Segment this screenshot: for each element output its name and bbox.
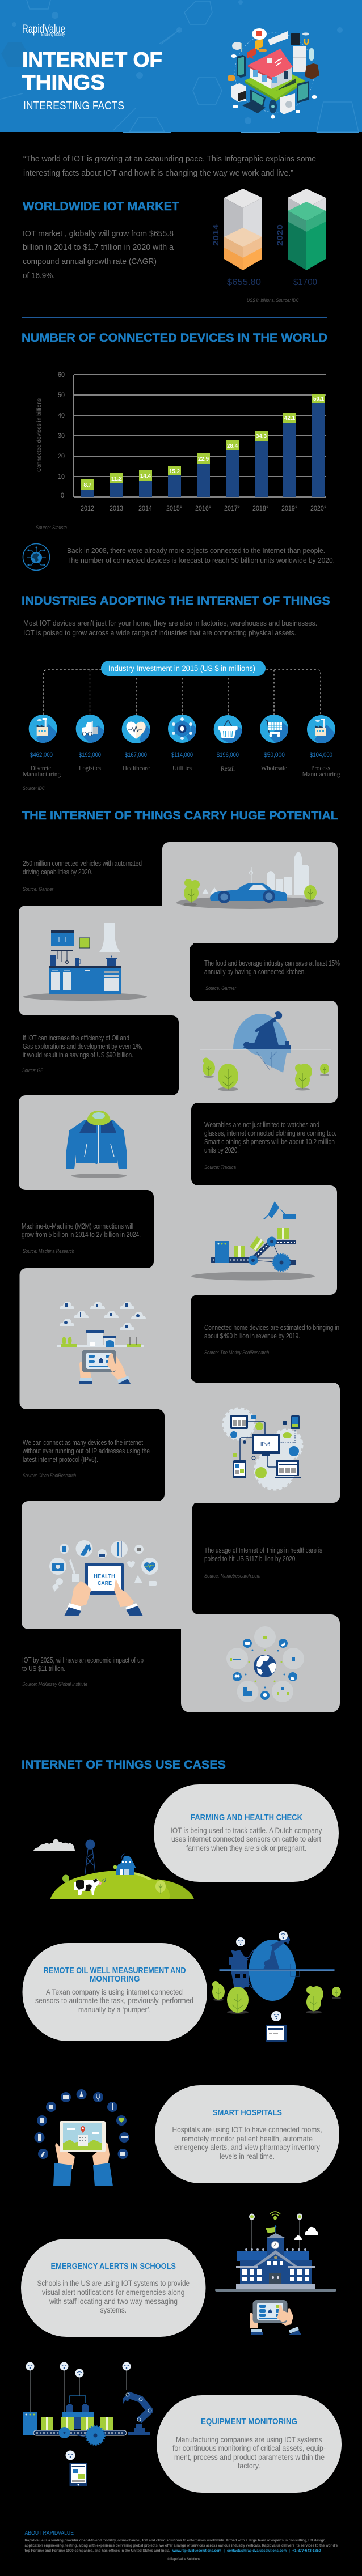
- cow: [74, 1878, 106, 1895]
- about section: [25, 2530, 338, 2561]
- fact: M2M: Machine-to-Machine (M2M) connections will: [22, 1222, 133, 1230]
- illustration: equipment monitoring: [23, 2362, 151, 2486]
- fact: food and beverage: annually by having a connected kitchen.: [204, 968, 306, 976]
- about section: ABOUT RAPIDVALUE: [25, 2530, 74, 2536]
- year labels: 2014: [211, 224, 220, 246]
- illustration: IPv6 network: [224, 1409, 302, 1489]
- panel: serpentine grey background: [0, 827, 362, 1725]
- panel: equipment monitoring: factory.: [238, 2461, 260, 2470]
- fact: healthcare: [204, 1546, 322, 1579]
- illustration: farm and cow: [33, 1839, 194, 1899]
- industry names: Manufacturing: [302, 770, 340, 778]
- industry investment values: $167,000: [125, 751, 147, 759]
- bars: 8.7: [84, 482, 92, 488]
- column 2020: [288, 189, 326, 270]
- chart: market hexagon columns: 2020: [275, 224, 284, 246]
- subtitle: INTERESTING FACTS: [23, 100, 124, 112]
- panel: smart hospitals: emergency alerts, and view pharmacy inventory: [174, 2143, 320, 2152]
- bars: 28.4: [227, 443, 238, 449]
- panel: emergency alerts in schools: systems.: [100, 2305, 127, 2314]
- medical icon ring: [34, 2089, 129, 2159]
- about section: © RapidValue Solutions: [167, 2557, 200, 2561]
- fact: connected vehicles: 250 million connected vehicles with automated: [23, 860, 142, 868]
- industry icon: utilities: [168, 715, 196, 743]
- market text: IOT market , globally will grow from $655.8: [23, 229, 174, 239]
- industry icon: wholesale: [260, 715, 288, 743]
- panel: emergency alerts in schools: EMERGENCY ALERTS IN SCHOOLS: [51, 2262, 176, 2271]
- logo: Enabling Mobility: [41, 33, 65, 37]
- tablet and hands: [79, 1350, 131, 1384]
- tablet: [266, 2025, 287, 2042]
- axis labels: 2012: [81, 505, 94, 512]
- tablet label: HEALTH: [94, 1573, 115, 1580]
- axis labels: 2019*: [281, 505, 297, 512]
- industries text: IOT is poised to grow across a wide range of industries that are connecting physical assets.: [23, 629, 296, 637]
- industry icon: logistics: [76, 715, 104, 743]
- intro quote: interesting facts about IOT and how it is changing the way we work and live.”: [23, 169, 293, 178]
- market text: of 16.9%.: [23, 271, 55, 280]
- panel: farming and health check: [154, 1784, 339, 1882]
- 2008 fact text: [67, 547, 335, 564]
- panel: farming and health check: uses internet connected sensors on cattle to alert: [171, 1834, 321, 1843]
- axis labels: Connected devices in billions: [36, 398, 43, 472]
- wifi bubbles: [26, 2362, 131, 2460]
- title: [22, 48, 162, 94]
- about section: application engineering, testing, along with experience delivering global projects, we offer a range of services across various industry verticals. RapidValue delivers its services to the world's: [25, 2544, 338, 2548]
- header banner: [0, 0, 362, 133]
- illustration: IPv6 network: IPv6: [260, 1441, 270, 1448]
- industry icon: process manufacturing: [307, 715, 335, 743]
- bars: 11.2: [111, 475, 122, 482]
- panel: equipment monitoring: for continuous monitoring of critical assets, equip-: [172, 2443, 326, 2452]
- industry names: Process: [311, 764, 330, 772]
- fact: wearables: Smart clothing shipments will be about 10.2 million: [204, 1138, 335, 1146]
- industries text: [23, 619, 317, 637]
- panel: equipment monitoring: Manufacturing companies are using IOT systems: [176, 2435, 322, 2444]
- source note: IDC: US$ in billions. Source: IDC: [247, 297, 299, 304]
- axis labels: 2017*: [224, 505, 240, 512]
- illustration: connected globe network: [226, 1626, 304, 1702]
- trees: [203, 1057, 329, 1091]
- about section: |: [224, 2549, 225, 2553]
- panel: emergency alerts in schools: visual alert notifications for emergencies along: [42, 2288, 185, 2297]
- bar chart: connected devices: [36, 372, 326, 512]
- illustration: factory conveyor: [191, 1201, 315, 1281]
- source: IDC: Source: IDC: [23, 785, 45, 792]
- panel: remote oil well: REMOTE OIL WELL MEASUREMENT AND: [43, 1966, 186, 1975]
- industry names: Manufacturing: [23, 770, 61, 778]
- source: Statista: Source: Statista: [36, 525, 67, 531]
- industry investment values: $462,000: [30, 751, 53, 759]
- about section: www.rapidvaluesolutions.com: [172, 2549, 221, 2553]
- panel: equipment monitoring: [157, 2395, 342, 2493]
- axis labels: 10: [58, 474, 65, 481]
- tablet label: CARE: [98, 1580, 112, 1587]
- fact: wearables: Source: Tractica: [204, 1164, 236, 1171]
- bars: 42.1: [284, 415, 295, 422]
- illustration: smart jacket: [66, 1111, 127, 1178]
- title: INTERNET OF: [22, 48, 162, 71]
- about section: contactus@rapidvaluesolutions.com: [227, 2549, 287, 2553]
- heading: industries: INDUSTRIES ADOPTING THE INTERNET OF THINGS: [22, 594, 330, 607]
- medical icons: [49, 1540, 158, 1592]
- trees: [212, 1981, 341, 2014]
- industry names: [23, 764, 340, 778]
- heading: worldwide IOT market: WORLDWIDE IOT MARKET: [23, 200, 179, 213]
- fact: M2M: Source: Machina Research: [23, 1248, 74, 1255]
- panel: remote oil well: sensors to automate the task, previously, performed: [35, 1996, 193, 2005]
- fact: wearables: Wearables are not just limited to watches and: [204, 1121, 319, 1129]
- illustration: smart hospital tablet: [34, 2089, 129, 2186]
- fact: economic impact: Source: McKinsey Global Institute: [22, 1681, 87, 1687]
- panel: remote oil well: manually by a ‘pumper’.: [78, 2005, 151, 2014]
- industry names: Retail: [221, 764, 235, 772]
- about section: |: [289, 2549, 290, 2553]
- chart: market hexagon columns: [211, 189, 326, 287]
- bars: 34.3: [256, 433, 267, 440]
- heading: huge potential: THE INTERNET OF THINGS CARRY HUGE POTENTIAL: [22, 809, 338, 822]
- axis labels: 50: [58, 392, 65, 399]
- industry investment values: [30, 751, 332, 759]
- panel: smart hospitals: [155, 2085, 339, 2183]
- fact: connected vehicles: Source: Gartner: [23, 886, 54, 892]
- trees: [183, 879, 317, 906]
- panel: smart hospitals: remotely monitor patient health, automate: [182, 2134, 313, 2143]
- panel: equipment monitoring: EQUIPMENT MONITORING: [201, 2417, 297, 2426]
- fact: oil and gas: If IOT can increase the efficiency of Oil and: [23, 1034, 129, 1042]
- panel: remote oil well: A Texan company is using internet connected: [46, 1987, 183, 1996]
- about section: top Fortune and Fortune 1000 companies, and has offices in the United States and India.: [25, 2549, 170, 2553]
- fact: healthcare: poised to hit US $117 billion by 2020.: [204, 1555, 297, 1563]
- chart: market hexagon columns: $1700: [293, 278, 317, 287]
- industry icon: retail: [213, 715, 242, 743]
- industry investment values: $104,000: [310, 751, 332, 759]
- heading: connected devices: NUMBER OF CONNECTED DEVICES IN THE WORLD: [22, 331, 327, 345]
- fact: economic impact: [22, 1656, 144, 1687]
- panel: smart hospitals: SMART HOSPITALS: [213, 2109, 282, 2118]
- bars: 15.2: [169, 468, 180, 475]
- illustration: connected car and city: [176, 852, 324, 909]
- fact: oil and gas: Gas explorations and development by even 1%,: [23, 1043, 142, 1051]
- panel: farming and health check: IOT is being used to track cattle. A Dutch company: [170, 1826, 322, 1835]
- illustration: oil pump: [200, 1011, 331, 1091]
- axis labels: 2013: [110, 505, 123, 512]
- bars: 50.1: [313, 396, 324, 402]
- panel: smart hospitals: levels in real time.: [220, 2152, 275, 2161]
- fact: connected home: about $490 billion in revenue by 2019.: [204, 1332, 300, 1340]
- 2008 fact text: The number of connected devices is forecast to reach 50 billion units worldwide by 2020.: [67, 556, 335, 564]
- tablet label: [94, 1573, 115, 1587]
- axis labels: 2018*: [252, 505, 268, 512]
- fact: IPv6: Source: Cisco FoolResearch: [23, 1473, 76, 1479]
- industry investment values: $114,000: [171, 751, 193, 759]
- market text: billion in 2014 to $1.7 trillion in 2020 with a: [23, 243, 174, 252]
- 2008 fact text: Back in 2008, there were already more objects connected to the Internet than people.: [67, 547, 325, 555]
- fact: oil and gas: it would result in a savings of US $90 billion.: [23, 1051, 133, 1059]
- icon: connected globe: [23, 544, 50, 570]
- hands: [64, 1579, 143, 1616]
- axis labels: 40: [58, 413, 65, 419]
- market text: [23, 229, 174, 280]
- illustration: connected home clouds: [57, 1302, 146, 1384]
- industry names: Healthcare: [123, 764, 150, 772]
- fact: oil and gas: Source: GE: [22, 1068, 43, 1074]
- column 2014: [224, 189, 262, 270]
- panel: remote oil well: [23, 1943, 207, 2041]
- about section: RapidValue is a leading provider of end-to-end mobility, omni-channel, IOT and cloud solutions to enterprises worldwide. Armed with a large team of experts in consulting, UX design,: [25, 2539, 326, 2543]
- industry names: Discrete: [31, 764, 51, 772]
- axis labels: 2015*: [166, 505, 182, 512]
- intro quote: [23, 155, 316, 178]
- logo: RapidValue: [22, 23, 65, 36]
- panel: farming and health check: FARMING AND HEALTH CHECK: [191, 1813, 302, 1822]
- industry icon: discrete manufacturing: [28, 715, 57, 743]
- bars: [81, 394, 325, 497]
- fact: wearables: units by 2020.: [204, 1146, 239, 1154]
- fact: M2M: [22, 1222, 141, 1255]
- fact: food and beverage: [204, 959, 340, 992]
- illustration: connected school: [215, 2212, 336, 2335]
- fact: economic impact: to US $11 trillion.: [22, 1665, 65, 1673]
- industries text: Most IOT devices aren’t just for your home, they are also in factories, warehouses and businesses.: [23, 619, 317, 627]
- fact: connected vehicles: [23, 860, 142, 892]
- axis labels: 60: [58, 372, 65, 379]
- fact: IPv6: We can connect as many devices to the internet: [23, 1439, 143, 1447]
- panel: remote oil well: MONITORING: [90, 1975, 140, 1984]
- axis labels: 20: [58, 453, 65, 460]
- bars: 14.4: [140, 473, 151, 479]
- fact: oil and gas: [22, 1034, 142, 1074]
- panel: smart hospitals: Hospitals are using IOT to have connected rooms,: [172, 2125, 322, 2134]
- axis labels: 2014: [138, 505, 153, 512]
- fact: food and beverage: Source: Gartner: [205, 985, 237, 992]
- industry icon: healthcare: [121, 715, 150, 743]
- panel: emergency alerts in schools: Schools in the US are using IOT systems to provide: [37, 2279, 190, 2288]
- title: THINGS: [22, 71, 105, 94]
- market text: compound annual growth rate (CAGR): [23, 257, 157, 266]
- axis labels: 0: [61, 492, 64, 499]
- axis labels: 2016*: [195, 505, 211, 512]
- heading: use cases: INTERNET OF THINGS USE CASES: [22, 1758, 226, 1771]
- fact: IPv6: latest internet protocol (IPv6).: [23, 1456, 98, 1464]
- fact: connected home: Source: The Motley FoolResearch: [204, 1350, 269, 1356]
- panel: emergency alerts in schools: with staff locating and two way messaging: [49, 2297, 178, 2306]
- tablet and hands: [250, 2300, 301, 2335]
- investment pill: Industry Investment in 2015 (US $ in millions): [108, 664, 255, 673]
- fact: connected home: [204, 1324, 339, 1356]
- industry investment values: $196,000: [217, 751, 239, 759]
- smart home illustration: [228, 28, 319, 119]
- fact: connected vehicles: driving capabilities by 2020.: [23, 868, 92, 876]
- panel: farming and health check: farmers when they are sick or pregnant.: [186, 1843, 306, 1852]
- mobile device: [69, 2463, 87, 2486]
- fact: IPv6: [22, 1439, 150, 1479]
- fact: IPv6: without ever running out of IP addresses using the: [22, 1447, 150, 1455]
- panel: equipment monitoring: ment, process and product parameters within the: [174, 2452, 325, 2462]
- chart: market hexagon columns: $655.80: [227, 278, 261, 287]
- industry names: Utilities: [172, 764, 192, 772]
- panel: emergency alerts in schools: [21, 2239, 205, 2337]
- wifi bubbles: [236, 1931, 288, 2021]
- fact: economic impact: IOT by 2025, will have an economic impact of up: [22, 1656, 144, 1664]
- fact: M2M: grow from 5 billion in 2014 to 27 billion in 2024.: [22, 1231, 141, 1239]
- about section: +1-877-643-1850: [292, 2549, 321, 2553]
- industry investment values: $50,000: [264, 751, 285, 759]
- logo: [22, 23, 65, 37]
- illustration: offshore oil monitoring: [212, 1931, 341, 2042]
- fact: healthcare: The usage of Internet of Things in healthcare is: [204, 1546, 322, 1554]
- axis labels: [36, 372, 326, 512]
- bars: 22.9: [198, 456, 209, 462]
- illustration: health care tablet: [49, 1540, 158, 1616]
- industry names: Logistics: [79, 764, 101, 772]
- industry investment values: $192,000: [79, 751, 101, 759]
- industry names: Wholesale: [261, 764, 287, 772]
- axis labels: 30: [58, 433, 65, 440]
- fact: wearables: [204, 1121, 336, 1171]
- investment pill: [101, 661, 266, 676]
- fact: healthcare: Source: Marketresearch.com: [204, 1573, 260, 1579]
- intro quote: “The world of IOT is growing at an astounding pace. This Infographic explains some: [23, 155, 316, 164]
- axis labels: 2020*: [310, 505, 326, 512]
- illustration: connected kitchen: [23, 923, 147, 1001]
